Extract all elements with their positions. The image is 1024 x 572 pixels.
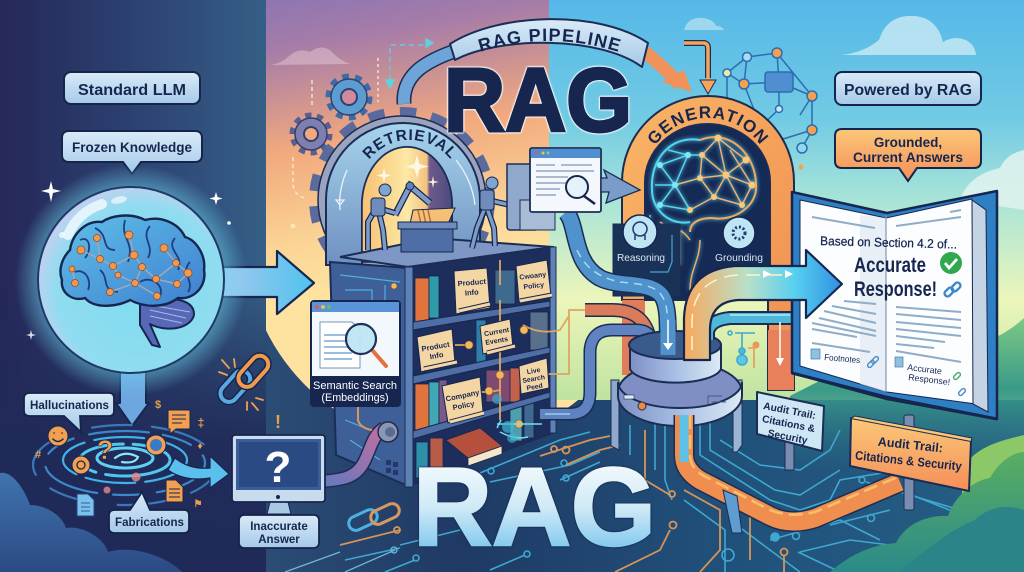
icon: star coin [146, 435, 166, 455]
panel: generation arch [621, 95, 795, 391]
scroll: Company Policy top: Cwoany [519, 271, 547, 282]
arrow: hub pipes down [663, 320, 673, 355]
arrow: swirl to monitor [168, 456, 229, 488]
icon: question: ? [97, 435, 113, 465]
cable plug [378, 422, 398, 442]
robot right [472, 177, 517, 248]
robot left [368, 184, 395, 250]
scroll: Company Policy top: Policy [523, 282, 545, 291]
salmon column [768, 330, 794, 390]
icon: monitor with question mark [232, 435, 325, 514]
book text: based on: Based on Section 4.2 of... [820, 234, 957, 252]
callout: Powered by RAG [835, 72, 981, 105]
scroll: Product Info middle [417, 329, 457, 372]
arrow: sphere to retrieval [222, 251, 314, 314]
book accurate response note [895, 357, 966, 396]
sign: large audit trail: Citations & Security [854, 448, 962, 474]
title: RAG top: RAG [444, 51, 632, 151]
callout: Grounded, Current Answers [835, 129, 981, 181]
scroll: Company Policy lower [442, 377, 484, 423]
callout: Inaccurate Answer: Answer [258, 534, 300, 546]
label: Grounding: Grounding [715, 252, 763, 264]
icon: gray gear [293, 116, 329, 152]
book text: accurate response: Response! [854, 278, 937, 301]
bottom-right bushes [830, 435, 1024, 572]
panel: server bookshelf tower [330, 238, 585, 487]
callout: Grounded, Current Answers: Current Answers [853, 150, 963, 165]
scroll: Live Search Peed: Live [526, 367, 541, 376]
icon: document scanner unit [507, 164, 555, 230]
icon: node network [723, 48, 817, 170]
callout: Frozen Knowledge [62, 131, 202, 174]
pipes into book [708, 315, 795, 340]
panel: semantic search window [311, 301, 400, 406]
callout: Grounded, Current Answers: Grounded, [874, 135, 942, 150]
panel: reasoning badge [613, 215, 680, 296]
shelves [413, 301, 550, 439]
scroll: Company Policy lower: Policy [452, 399, 476, 412]
label: Semantic Search (Embeddings) [313, 380, 397, 404]
icon: smiley [48, 426, 68, 446]
decorative gears [293, 77, 369, 152]
label: Reasoning: Reasoning [617, 252, 665, 264]
scroll: Live Search Peed: Search [522, 374, 546, 385]
crystal sphere with brain [15, 164, 247, 396]
pink cable [300, 428, 384, 481]
pipe drain [723, 490, 742, 533]
arrow down on salmon column [776, 322, 784, 366]
book footnotes [811, 349, 879, 368]
robots loading data [368, 177, 517, 252]
callout: Standard LLM: Standard LLM [78, 82, 186, 99]
books [415, 270, 548, 478]
arrow: document to generation [601, 170, 640, 203]
pipes [300, 212, 668, 481]
glyphs: stray symbols: $ [155, 399, 161, 411]
salmon pipe [585, 310, 650, 340]
scroll: Product Info top: Info [465, 287, 479, 298]
icon: blue document [77, 494, 94, 516]
circuit board traces [345, 331, 1024, 572]
glyphs: stray symbols [35, 399, 204, 510]
arrow: generation output to book [684, 250, 842, 360]
icon: glowing neural brain [650, 134, 756, 290]
connector lines [455, 260, 585, 420]
callout: Standard LLM [64, 72, 200, 104]
panel: retrieval arch [309, 107, 495, 266]
orange arc tube [645, 52, 692, 92]
callout: Inaccurate Answer [239, 515, 319, 548]
heading: GENERATION: GENERATION [648, 106, 768, 144]
glyphs: stray symbols: ♦ [197, 441, 203, 452]
banner: RAG PIPELINE [449, 18, 649, 68]
icon: broken chain [217, 352, 272, 410]
central hub machine [611, 331, 742, 452]
icon: swirl vortex [33, 425, 217, 505]
icon: speech note [168, 410, 190, 434]
scroll: Company Policy lower: Company [445, 387, 481, 404]
icon: blue link [943, 281, 962, 298]
icon: sparkles around sphere [26, 181, 231, 340]
book footnotes: Footnotes [824, 352, 861, 365]
dashed flow markers [290, 39, 433, 228]
icon: monitor with question mark: ? [265, 443, 291, 492]
scroll: Company Policy top [516, 260, 552, 302]
callout: Fabrications: Fabrications [115, 515, 184, 529]
icon: exclamation: ! [275, 412, 281, 432]
ground hills right [790, 318, 1024, 572]
callout: Fabrications [109, 492, 189, 533]
icon: sparkles [376, 155, 439, 188]
sign: large audit trail: Audit Trail: [877, 435, 944, 455]
sign: small audit trail: Citations & [761, 414, 817, 435]
purple pipe [540, 330, 654, 414]
sign: large audit trail [850, 415, 972, 510]
icon: magnifier [346, 324, 386, 366]
orange audit pipeline [684, 415, 900, 522]
book text: accurate response [854, 254, 937, 301]
banner arrows [404, 43, 716, 104]
arrow: sphere down to swirl [116, 368, 149, 426]
icon: magnifier [556, 176, 595, 208]
scroll: Product Info middle: Product [421, 340, 451, 353]
orange down arrow [684, 43, 716, 94]
book accurate response note: Accurate [907, 362, 943, 376]
glyphs: stray symbols: ⚑ [194, 499, 202, 510]
label: Semantic Search (Embeddings): Semantic Search [313, 380, 397, 392]
glyphs: stray symbols: ‡ [198, 416, 204, 430]
icon: brain [60, 216, 204, 347]
scroll: Current Events: Events [485, 336, 509, 347]
scroll: Live Search Peed: Peed [526, 383, 543, 392]
icon: chain bottom [346, 501, 402, 533]
book accurate response note: Response! [908, 372, 951, 387]
callout: Frozen Knowledge: Frozen Knowledge [72, 139, 192, 155]
blue arc tube [404, 52, 452, 104]
sign: small audit trail: Security [767, 428, 809, 447]
scroll: Live Search Peed [519, 358, 549, 394]
tower top [340, 238, 553, 267]
book: open answer [792, 191, 997, 419]
title: RAG bottom: RAG [413, 446, 656, 569]
icon: refresh badge [72, 456, 90, 474]
scroll: Product Info middle: Info [429, 350, 445, 361]
shelf front [408, 247, 555, 486]
scroll: Product Info top: Product [457, 277, 487, 288]
left storm cloud [0, 473, 182, 572]
icon: blue gear [329, 77, 369, 117]
icon: orange document [166, 480, 183, 502]
heading: RETRIEVAL: RETRIEVAL [362, 129, 454, 159]
icon: green check [940, 252, 962, 274]
sign: small audit trail [757, 392, 824, 470]
callout: Inaccurate Answer: Inaccurate [250, 521, 308, 533]
banner: RAG PIPELINE: RAG PIPELINE [478, 28, 621, 52]
callout: Hallucinations: Hallucinations [30, 398, 109, 412]
glyphs: stray symbols: # [35, 449, 41, 461]
tower left side [330, 262, 408, 486]
icons: floating errors [35, 399, 204, 516]
scroll: Current Events: Current [484, 327, 510, 338]
callout: Powered by RAG: Powered by RAG [844, 82, 972, 99]
callout: Hallucinations [24, 393, 114, 432]
scroll: Product Info top [454, 268, 490, 314]
book text: accurate response: Accurate [854, 254, 926, 277]
panel: grounding badge [715, 217, 763, 264]
robotic arm and box [395, 182, 457, 252]
scroll: Current Events [480, 319, 515, 354]
panel: retrieved document window [530, 148, 601, 212]
blue pipe from document [566, 212, 668, 355]
sign: small audit trail: Audit Trail: [762, 401, 817, 422]
label: Semantic Search (Embeddings): (Embeddings) [321, 392, 389, 404]
